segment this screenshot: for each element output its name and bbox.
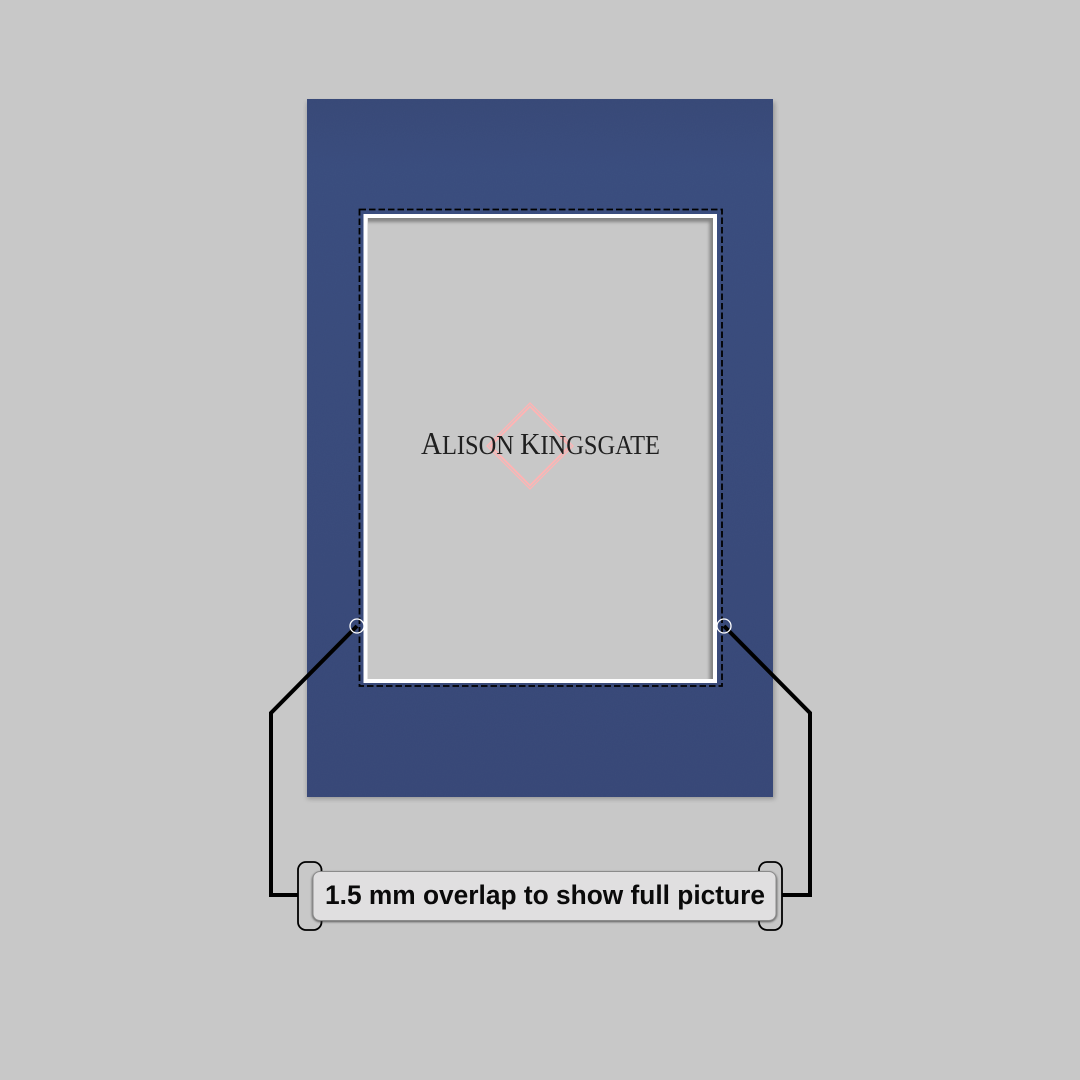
logo: Alison Kingsgate xyxy=(421,403,660,489)
label box xyxy=(313,872,776,920)
left bracket tab xyxy=(298,862,322,930)
panel: navy mount board xyxy=(307,99,775,799)
panel: picture window with white bevel xyxy=(360,210,722,690)
callout: overlap label xyxy=(298,862,782,930)
icon: pink double diamond xyxy=(487,403,573,489)
right bracket tab xyxy=(759,862,782,930)
dashed overlap outline xyxy=(360,210,722,686)
label text: 1.5 mm overlap to show full picture xyxy=(325,880,765,910)
label shadow xyxy=(312,872,777,922)
logo wordmark: ALISON KINGSGATE xyxy=(421,425,660,461)
left marker circle xyxy=(350,619,364,633)
arrow: left leader line xyxy=(271,626,357,895)
arrow: right leader line xyxy=(724,626,810,895)
right marker circle xyxy=(717,619,731,633)
